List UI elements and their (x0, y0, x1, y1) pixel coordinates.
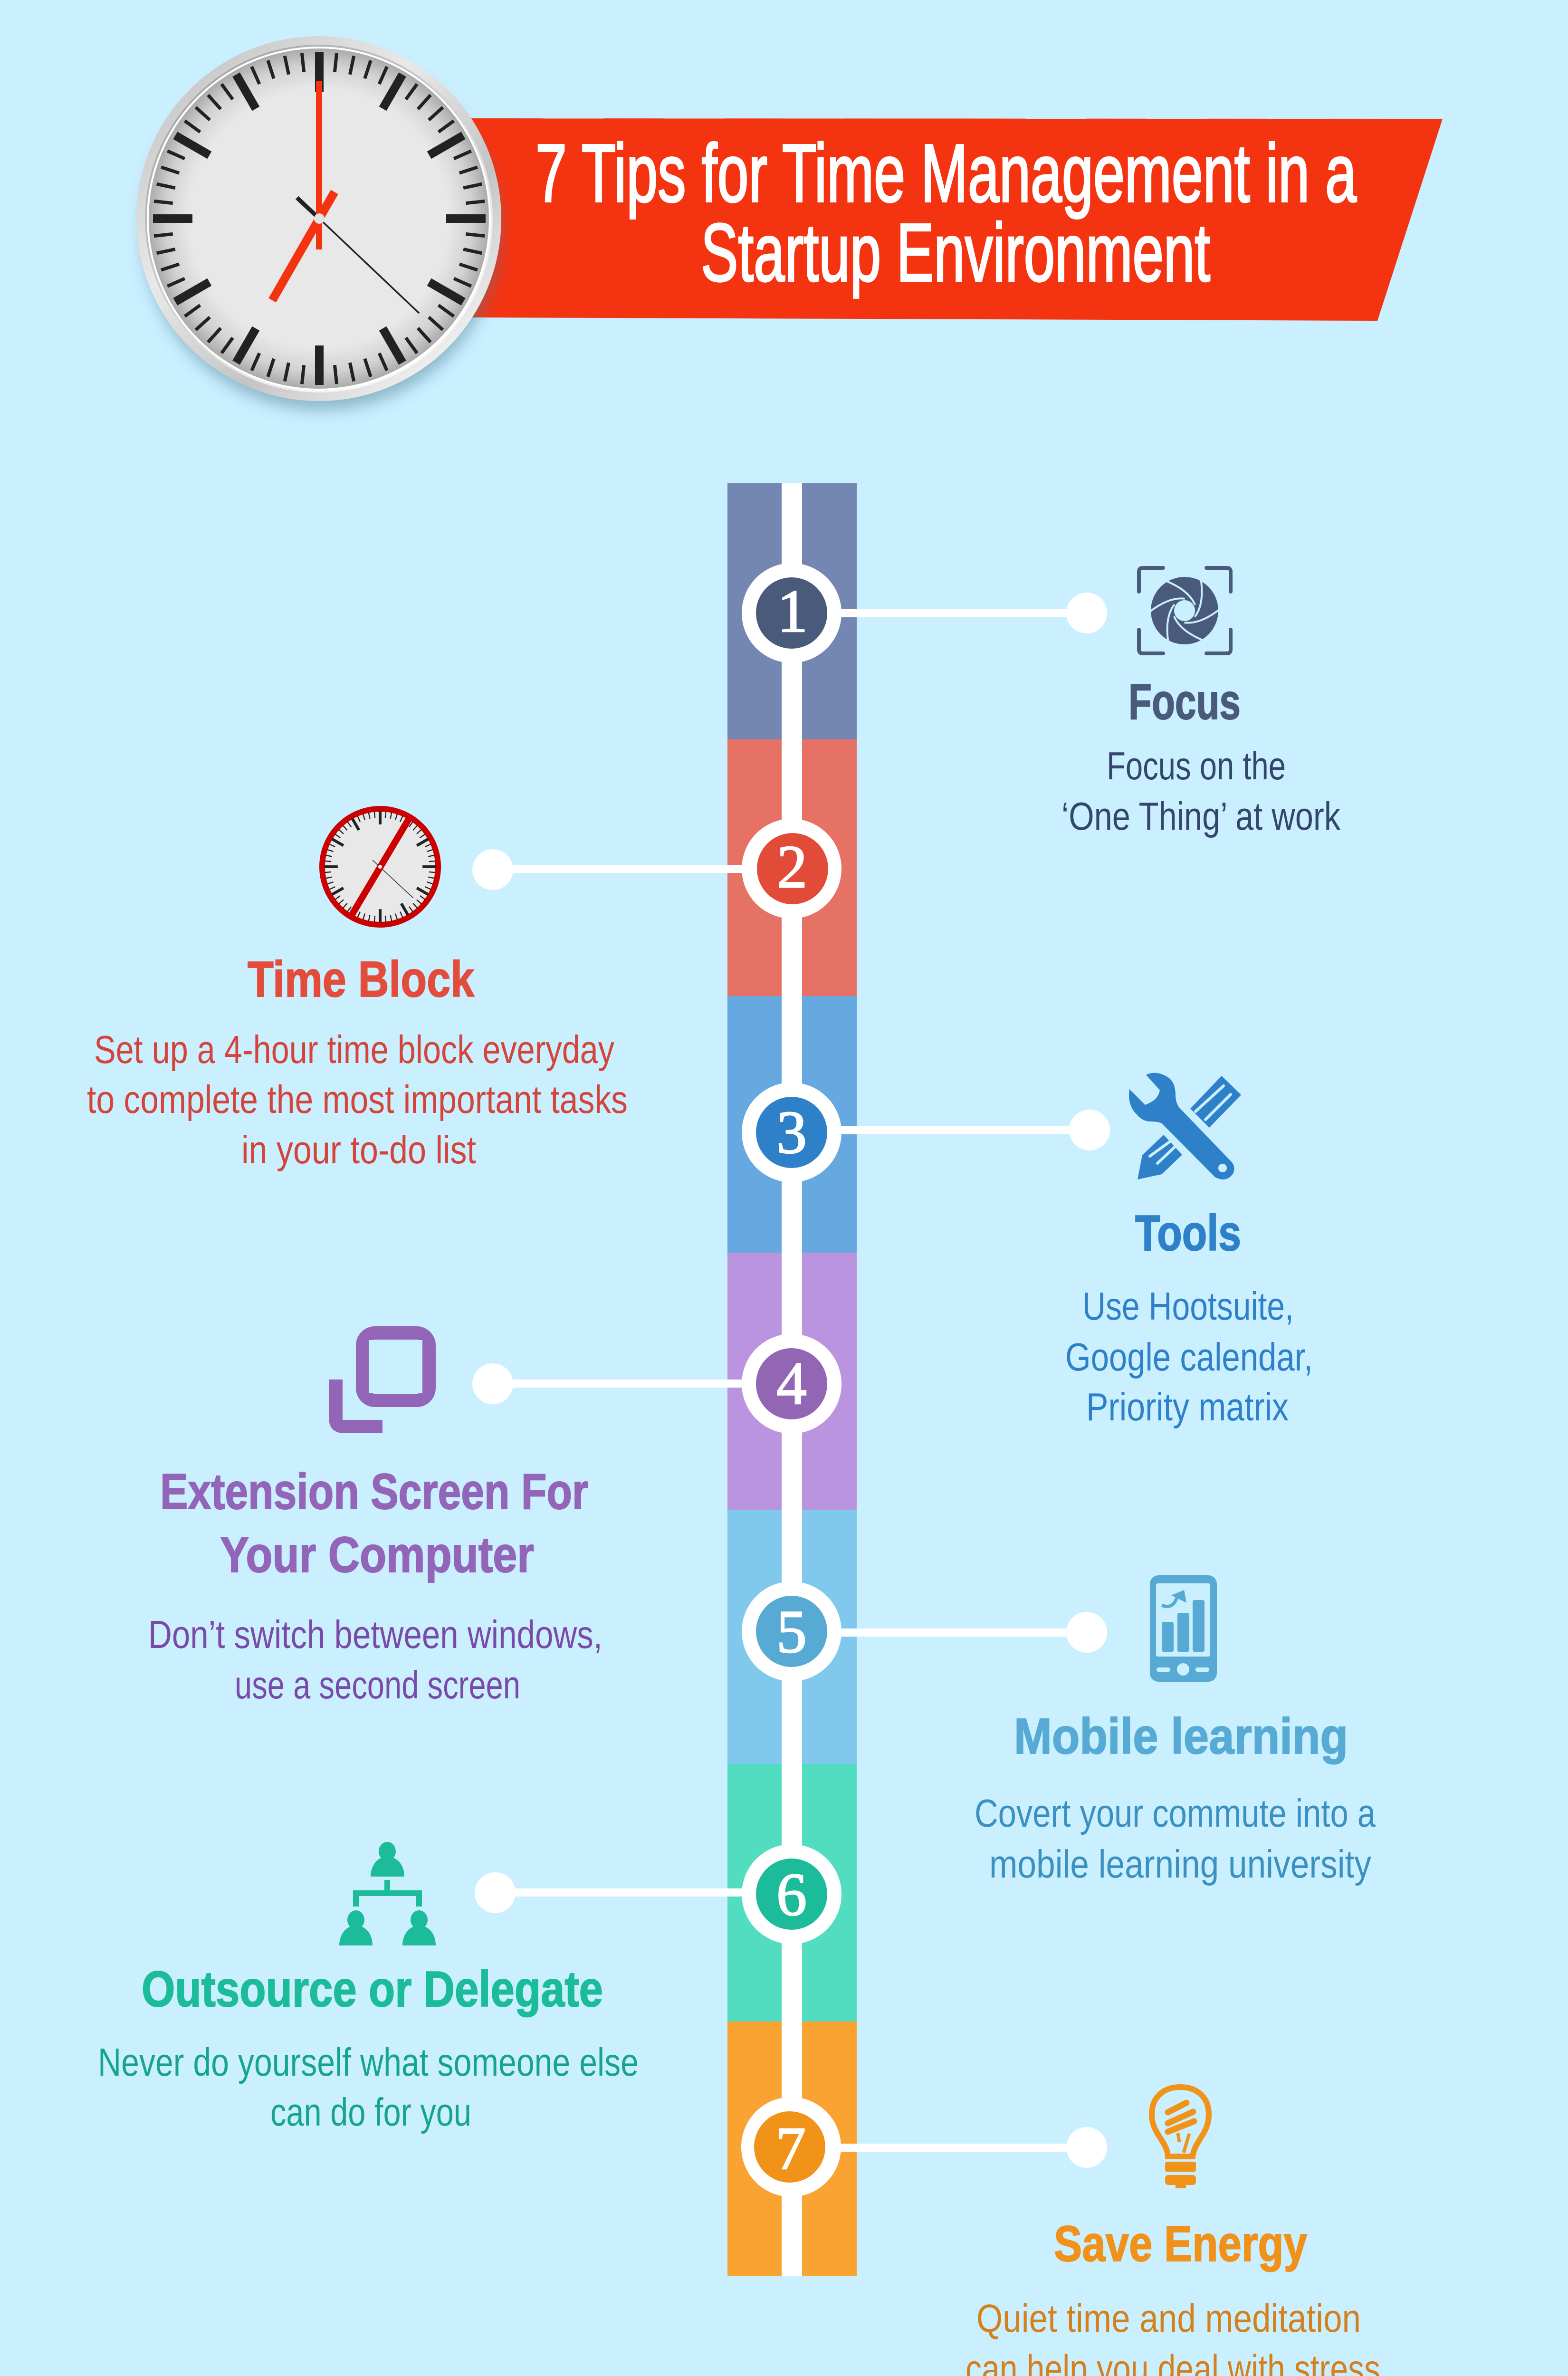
title banner (466, 118, 1443, 321)
text: outsource description (98, 2040, 639, 2134)
text: mobile learning description (975, 1791, 1376, 1886)
tip 1 marker and connector: 1 (777, 577, 808, 645)
tip 7 marker and connector (741, 2097, 1107, 2197)
icon: delegation org chart (339, 1842, 436, 1945)
text: time block description: in your to-do list (241, 1128, 476, 1172)
text: tools description (1065, 1284, 1313, 1429)
text: focus description (1061, 744, 1340, 838)
text: time block description (87, 1027, 628, 1172)
icon: light bulb (1152, 2087, 1209, 2188)
heading: Tools: Tools (1135, 1205, 1241, 1261)
heading: Outsource or Delegate: Outsource or Delegate (142, 1961, 603, 2017)
tip 4 marker and connector (472, 1334, 841, 1434)
tip 5 marker and connector (742, 1581, 1107, 1681)
text: mobile learning description: Covert your commute into a (975, 1791, 1376, 1835)
heading: Mobile learning: Mobile learning (1014, 1708, 1348, 1764)
heading: Extension Screen For Your Computer: Your Computer (220, 1527, 534, 1583)
tip 1 marker and connector (742, 563, 1107, 663)
text: extension screen description: Don’t switch between windows, (148, 1612, 602, 1657)
text: save energy description (966, 2296, 1380, 2376)
icon: wall clock (136, 36, 501, 410)
heading: Extension Screen For Your Computer (160, 1464, 588, 1583)
tip 3 marker and connector: 3 (776, 1099, 807, 1166)
icon: wrench and pencil (1129, 1073, 1241, 1179)
title: Startup Environment (701, 206, 1210, 298)
text: extension screen description: use a second screen (235, 1663, 520, 1707)
tip 4 marker and connector: 4 (776, 1350, 807, 1417)
text: focus description: Focus on the (1107, 744, 1286, 788)
text: time block description: to complete the most important tasks (87, 1077, 628, 1121)
tip 6 marker and connector (475, 1844, 841, 1944)
icon: mobile learning phone (1150, 1575, 1217, 1682)
heading: Time Block: Time Block (248, 951, 475, 1007)
text: mobile learning description: mobile learning university (989, 1842, 1371, 1886)
icon: extension screen (329, 1333, 429, 1433)
tip 7 marker and connector: 7 (775, 2115, 806, 2182)
tip 6 marker and connector: 6 (776, 1861, 807, 1928)
text: time block description: Set up a 4-hour time block everyday (94, 1027, 614, 1072)
icon: focus aperture (1139, 568, 1231, 653)
text: tools description: Priority matrix (1086, 1385, 1289, 1429)
heading: Save Energy: Save Energy (1054, 2216, 1307, 2272)
tip 2 marker and connector (472, 819, 841, 919)
text: extension screen description (148, 1612, 602, 1707)
title (535, 127, 1357, 298)
text: outsource description: can do for you (270, 2090, 471, 2134)
tip 3 marker and connector (742, 1083, 1110, 1182)
text: tools description: Google calendar, (1065, 1335, 1313, 1379)
tip 5 marker and connector: 5 (776, 1598, 807, 1666)
icon: crossed-out clock (322, 809, 438, 925)
text: tools description: Use Hootsuite, (1082, 1284, 1294, 1328)
text: outsource description: Never do yourself what someone else (98, 2040, 639, 2084)
heading: Focus: Focus (1128, 674, 1241, 730)
text: save energy description: Quiet time and meditation (976, 2296, 1361, 2340)
vertical timeline column (727, 483, 857, 2276)
heading: Extension Screen For Your Computer: Extension Screen For (160, 1464, 588, 1520)
tip 2 marker and connector: 2 (777, 833, 807, 901)
text: focus description: ‘One Thing’ at work (1061, 794, 1340, 838)
